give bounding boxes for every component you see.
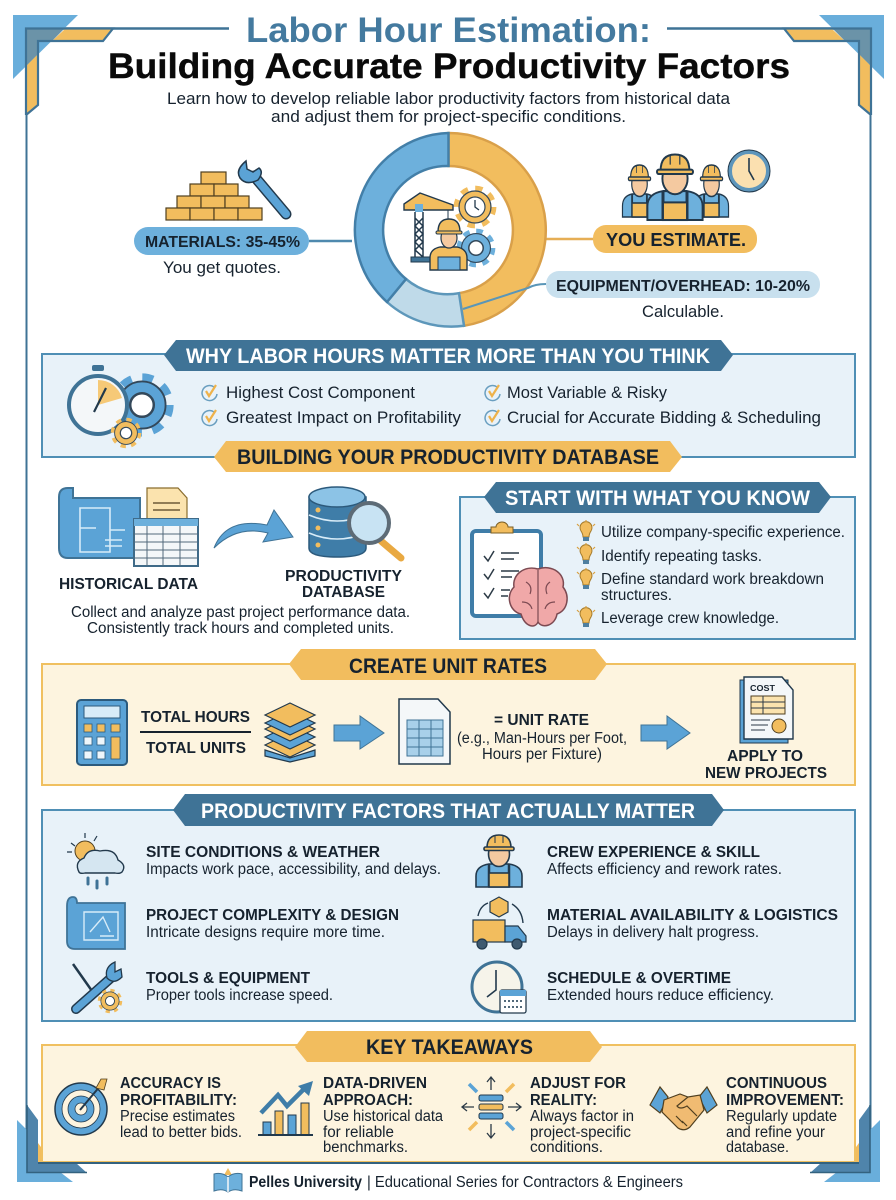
tips list: Define standard work breakdown	[601, 571, 824, 588]
takeaway: adjust for reality: ADJUST FOR	[530, 1075, 626, 1092]
text: you get quotes: You get quotes.	[163, 259, 281, 277]
item: crew experience: Affects efficiency and rework rates.	[547, 861, 782, 878]
text: collect and analyze: Consistently track hours and completed units.	[87, 620, 394, 637]
tips list: Leverage crew knowledge.	[601, 610, 779, 627]
icon: database with magnifier	[309, 487, 401, 558]
icon: calculator	[77, 700, 127, 765]
item: project complexity: Intricate designs require more time.	[146, 924, 385, 941]
text: collect and analyze	[71, 604, 410, 637]
arrow: historical data to database	[214, 510, 293, 548]
takeaway: data-driven: for reliable	[323, 1124, 394, 1141]
donut chart: cost breakdown	[309, 133, 593, 327]
item: project complexity	[146, 907, 399, 941]
text: unit rate definition: = UNIT RATE	[494, 712, 589, 729]
arrow: to spreadsheet	[334, 716, 384, 749]
text: apply to new projects	[705, 748, 827, 782]
formula: total hours over total units: TOTAL HOURS	[141, 709, 250, 726]
banner: why labor hours matter: WHY LABOR HOURS MATTER MORE THAN YOU THINK	[186, 345, 710, 368]
item: site conditions	[146, 844, 441, 878]
takeaway: data-driven: benchmarks.	[323, 1139, 408, 1156]
icon: crane, worker and gears	[404, 189, 493, 270]
label: productivity database	[285, 568, 402, 601]
takeaway: data-driven: Use historical data	[323, 1108, 443, 1125]
takeaway: data-driven: APPROACH:	[323, 1092, 413, 1109]
panel: key takeaways	[38, 1031, 859, 1163]
text: apply to new projects: APPLY TO	[727, 748, 803, 765]
takeaway: adjust for reality: project-specific	[530, 1124, 631, 1141]
banner: productivity factors	[173, 794, 724, 826]
takeaway: continuous improvement: IMPROVEMENT:	[726, 1092, 844, 1109]
icon: target and arrow	[55, 1079, 107, 1135]
item: site conditions: Impacts work pace, accessibility, and delays.	[146, 861, 441, 878]
takeaway: continuous improvement: and refine your	[726, 1124, 825, 1141]
banner: key takeaways: KEY TAKEAWAYS	[366, 1036, 533, 1059]
banner: start with what you know	[484, 482, 831, 513]
takeaway: accuracy: ACCURACY IS	[120, 1075, 221, 1092]
takeaway: continuous improvement	[726, 1075, 844, 1156]
text: calculable: Calculable.	[642, 303, 724, 321]
label: productivity database: DATABASE	[302, 584, 385, 601]
pill: materials: MATERIALS: 35-45%	[145, 234, 300, 251]
banner: create unit rates: CREATE UNIT RATES	[349, 655, 547, 678]
banner: create unit rates	[289, 649, 607, 680]
panel: productivity factors	[42, 794, 855, 1021]
item: tools and equipment	[146, 970, 333, 1004]
icon: adjust arrows	[462, 1077, 521, 1138]
icon: clock and calendar	[472, 962, 526, 1013]
icon: cost document: COST	[750, 683, 776, 693]
item: crew experience	[547, 844, 782, 878]
item: tools and equipment: TOOLS & EQUIPMENT	[146, 970, 310, 987]
banner: productivity factors: PRODUCTIVITY FACTORS THAT ACTUALLY MATTER	[201, 800, 695, 823]
text: apply to new projects: NEW PROJECTS	[705, 765, 827, 782]
icon: clipboard and brain	[472, 522, 567, 626]
panel: why labor hours matter	[42, 340, 855, 457]
takeaway: data-driven	[323, 1075, 443, 1156]
icon: crew worker	[476, 835, 522, 887]
icon: workers and clock	[622, 150, 770, 220]
checklist: why labor hours matter	[202, 383, 821, 427]
takeaway: adjust for reality: conditions.	[530, 1139, 603, 1156]
checklist: why labor hours matter: Greatest Impact on Profitability	[226, 408, 461, 427]
text: unit rate definition	[457, 712, 627, 763]
icon: stopwatch and gears	[69, 365, 169, 446]
tips list	[577, 520, 845, 627]
tips list: structures.	[601, 587, 672, 604]
tips list: Identify repeating tasks.	[601, 548, 762, 565]
tips list: Utilize company-specific experience.	[601, 524, 845, 541]
item: schedule and overtime: Extended hours reduce efficiency.	[547, 987, 774, 1004]
item: project complexity: PROJECT COMPLEXITY & DESIGN	[146, 907, 399, 924]
takeaway: accuracy: lead to better bids.	[120, 1124, 242, 1141]
takeaway: accuracy: PROFITABILITY:	[120, 1092, 237, 1109]
pill: equipment and overhead	[546, 271, 820, 298]
title: Building Accurate Productivity Factors	[108, 47, 790, 86]
takeaway: continuous improvement: database.	[726, 1139, 789, 1156]
icon: stacked layers	[265, 703, 315, 762]
icon: university logo	[214, 1168, 242, 1192]
takeaway: adjust for reality: REALITY:	[530, 1092, 597, 1109]
banner: key takeaways	[295, 1031, 602, 1062]
pill: you estimate: YOU ESTIMATE.	[606, 230, 746, 250]
pill: equipment and overhead: EQUIPMENT/OVERHEAD: 10-20%	[556, 278, 810, 295]
item: material availability: MATERIAL AVAILABILITY & LOGISTICS	[547, 907, 838, 924]
text: unit rate definition: (e.g., Man-Hours per Foot,	[457, 730, 627, 747]
item: material availability: Delays in delivery halt progress.	[547, 924, 759, 941]
subtitle: Learn how to develop reliable labor productivity factors from historical data	[167, 90, 731, 108]
checklist: why labor hours matter: Most Variable & Risky	[507, 383, 667, 402]
formula: total hours over total units: TOTAL UNITS	[146, 740, 246, 757]
icon: blueprint with document and table	[59, 488, 198, 566]
title	[108, 11, 790, 86]
takeaway: accuracy	[120, 1075, 242, 1141]
banner: start with what you know: START WITH WHAT YOU KNOW	[505, 487, 810, 510]
label: productivity database: PRODUCTIVITY	[285, 568, 402, 585]
icon: growth chart	[258, 1081, 313, 1135]
text: collect and analyze: Collect and analyze past project performance data.	[71, 604, 410, 621]
subtitle	[167, 90, 731, 126]
title: Labor Hour Estimation:	[246, 11, 651, 50]
item: schedule and overtime: SCHEDULE & OVERTIME	[547, 970, 731, 987]
footer text: | Educational Series for Contractors & Engineers	[367, 1174, 683, 1191]
panel: create unit rates	[42, 649, 855, 785]
icon: handshake	[650, 1087, 717, 1130]
arrow: to new projects	[641, 716, 690, 749]
pill: materials	[134, 227, 309, 255]
label: historical data: HISTORICAL DATA	[59, 576, 198, 593]
icon: weather	[67, 833, 124, 888]
icon: bricks and wrench	[166, 161, 286, 220]
item: tools and equipment: Proper tools increase speed.	[146, 987, 333, 1004]
banner: building your productivity database: BUILDING YOUR PRODUCTIVITY DATABASE	[237, 446, 659, 469]
takeaway: adjust for reality	[530, 1075, 634, 1156]
item: crew experience: CREW EXPERIENCE & SKILL	[547, 844, 760, 861]
checklist: why labor hours matter: Highest Cost Component	[226, 383, 415, 402]
item: site conditions: SITE CONDITIONS & WEATHER	[146, 844, 380, 861]
checklist: why labor hours matter: Crucial for Accurate Bidding & Scheduling	[507, 408, 821, 427]
icon: cost document	[740, 677, 793, 743]
icon: tools and gear	[73, 962, 122, 1011]
footer text: Pelles University	[249, 1174, 362, 1191]
item: material availability	[547, 907, 838, 941]
icon: spreadsheet	[399, 699, 450, 764]
icon: truck and box	[473, 897, 526, 949]
takeaway: continuous improvement: Regularly update	[726, 1108, 837, 1125]
text: unit rate definition: Hours per Fixture)	[482, 746, 602, 763]
takeaway: data-driven: DATA-DRIVEN	[323, 1075, 427, 1092]
subtitle: and adjust them for project-specific conditions.	[271, 108, 626, 126]
takeaway: continuous improvement: CONTINUOUS	[726, 1075, 827, 1092]
item: schedule and overtime	[547, 970, 774, 1004]
panel: start with what you know	[460, 482, 855, 639]
takeaway: accuracy: Precise estimates	[120, 1108, 235, 1125]
pill: you estimate	[593, 225, 757, 253]
icon: blueprint design	[67, 897, 125, 949]
formula: total hours over total units	[140, 709, 251, 757]
takeaway: adjust for reality: Always factor in	[530, 1108, 634, 1125]
